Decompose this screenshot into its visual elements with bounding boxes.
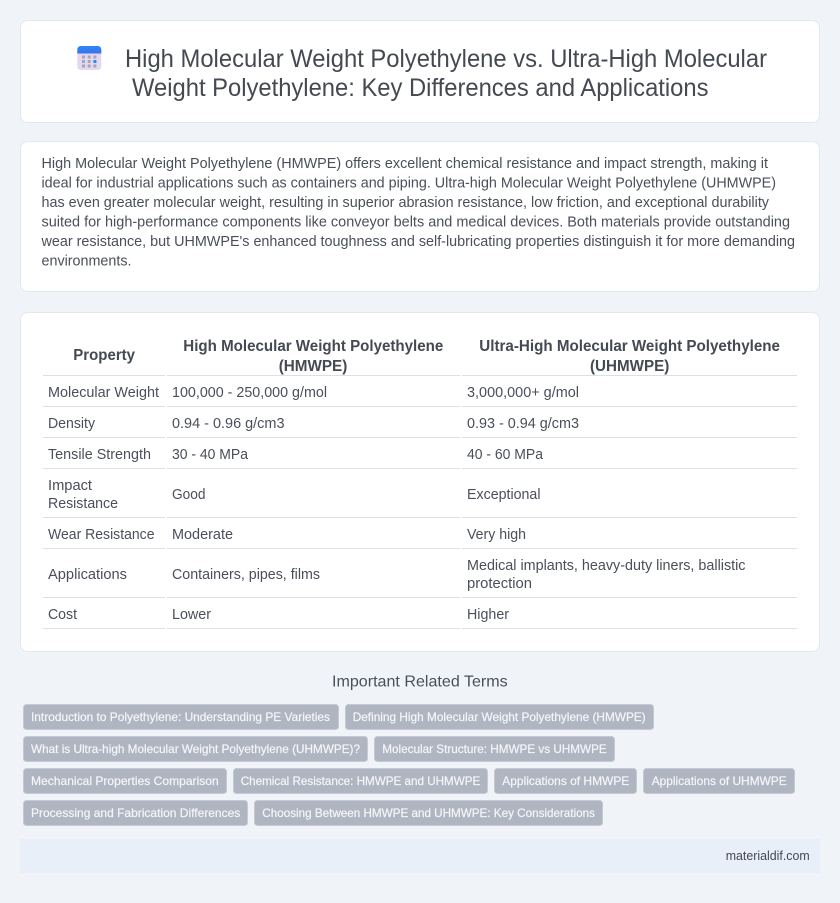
tag xyxy=(234,768,488,794)
table row: density: 0.93 - 0.94 g/cm3 xyxy=(467,416,579,432)
text block: introduction paragraph: has even greater molecular weight, resulting in superior abrasion resistance, low friction, and exceptional durability xyxy=(42,195,770,211)
tag xyxy=(346,704,654,730)
footer bar xyxy=(20,839,820,873)
table header row: (HMWPE) xyxy=(279,358,347,375)
table row: molecular weight: 100,000 - 250,000 g/mol xyxy=(172,385,327,401)
tag xyxy=(494,768,636,794)
table row: density: Density xyxy=(48,416,96,432)
tag: Defining High Molecular Weight Polyethylene (HMWPE) xyxy=(353,710,646,724)
table row: wear resistance xyxy=(48,527,526,543)
tag: Applications of HMWPE xyxy=(502,774,629,788)
tag xyxy=(254,800,602,826)
table row: tensile strength: 30 - 40 MPa xyxy=(172,447,248,463)
title xyxy=(125,45,767,102)
tag xyxy=(644,768,794,794)
table header row: Property xyxy=(73,347,135,364)
table header row: High Molecular Weight Polyethylene xyxy=(183,338,443,355)
table row: applications: Containers, pipes, films xyxy=(172,567,320,583)
title: High Molecular Weight Polyethylene vs. Ultra-High Molecular xyxy=(125,45,767,73)
table row: applications: Applications xyxy=(48,567,127,583)
table row: cost: Cost xyxy=(48,607,77,623)
table row: molecular weight xyxy=(48,385,579,401)
table row: applications xyxy=(48,558,746,592)
tag: Introduction to Polyethylene: Understanding PE Varieties xyxy=(31,710,330,724)
tag xyxy=(374,736,614,762)
tag: Applications of UHMWPE xyxy=(652,774,787,788)
table row: density xyxy=(48,416,579,432)
text block: introduction paragraph: environments. xyxy=(42,254,132,270)
text block: introduction paragraph: wear resistance, but UHMWPE's enhanced toughness and self-lubricating properties distinguish it for more demanding xyxy=(41,234,795,250)
tag: Choosing Between HMWPE and UHMWPE: Key Considerations xyxy=(262,806,595,820)
table header row: (UHMWPE) xyxy=(590,358,669,375)
panel: title header xyxy=(20,20,820,122)
tag: Processing and Fabrication Differences xyxy=(31,806,240,820)
tag xyxy=(24,768,226,794)
text block: introduction paragraph xyxy=(41,156,795,270)
table row: tensile strength xyxy=(48,447,543,463)
table header row xyxy=(73,338,780,375)
icon: calendar xyxy=(77,46,101,70)
table row: impact resistance: Good xyxy=(172,487,206,503)
footer source text: materialdif.com xyxy=(726,849,810,863)
table row: cost: Higher xyxy=(467,607,509,623)
table row: wear resistance: Moderate xyxy=(172,527,233,543)
table row: impact resistance: Impact xyxy=(48,478,92,494)
table row: wear resistance: Very high xyxy=(467,527,526,543)
table row: tensile strength: Tensile Strength xyxy=(48,447,151,463)
panel: related term tags xyxy=(24,704,794,826)
tag xyxy=(24,800,248,826)
table row: density: 0.94 - 0.96 g/cm3 xyxy=(172,416,284,432)
table header row: Ultra-High Molecular Weight Polyethylene xyxy=(479,338,780,355)
panel: introduction xyxy=(20,142,820,292)
tag: Molecular Structure: HMWPE vs UHMWPE xyxy=(382,742,607,756)
tag: Mechanical Properties Comparison xyxy=(31,774,219,788)
title: Weight Polyethylene: Key Differences and Applications xyxy=(132,74,708,102)
tag xyxy=(24,736,368,762)
table row: applications: Medical implants, heavy-duty liners, ballistic xyxy=(467,558,746,574)
tag: Chemical Resistance: HMWPE and UHMWPE xyxy=(241,774,480,788)
heading: important related terms: Important Related Terms xyxy=(332,674,508,690)
tag: What is Ultra-high Molecular Weight Polyethylene (UHMWPE)? xyxy=(31,742,360,756)
tag xyxy=(24,704,338,730)
table row: molecular weight: Molecular Weight xyxy=(48,385,159,401)
text block: introduction paragraph: High Molecular Weight Polyethylene (HMWPE) offers excellent chemical resistance and impact strength, making it xyxy=(42,156,768,172)
table row: impact resistance: Resistance xyxy=(48,496,118,512)
table row: molecular weight: 3,000,000+ g/mol xyxy=(467,385,579,401)
table row: tensile strength: 40 - 60 MPa xyxy=(467,447,543,463)
text block: introduction paragraph: ideal for industrial applications such as containers and piping. Ultra-high Molecular Weight Polyethylene (UHMWPE) xyxy=(42,176,776,192)
table row: applications: protection xyxy=(467,576,532,592)
table row: impact resistance: Exceptional xyxy=(467,487,540,503)
table row: cost xyxy=(48,607,509,623)
table row: impact resistance xyxy=(48,478,540,512)
text block: introduction paragraph: suited for high-performance components like conveyor belts and medical devices. Both materials provide outstanding xyxy=(42,214,790,230)
panel: comparison table xyxy=(20,312,820,652)
table row: wear resistance: Wear Resistance xyxy=(48,527,154,543)
table row: cost: Lower xyxy=(172,607,211,623)
